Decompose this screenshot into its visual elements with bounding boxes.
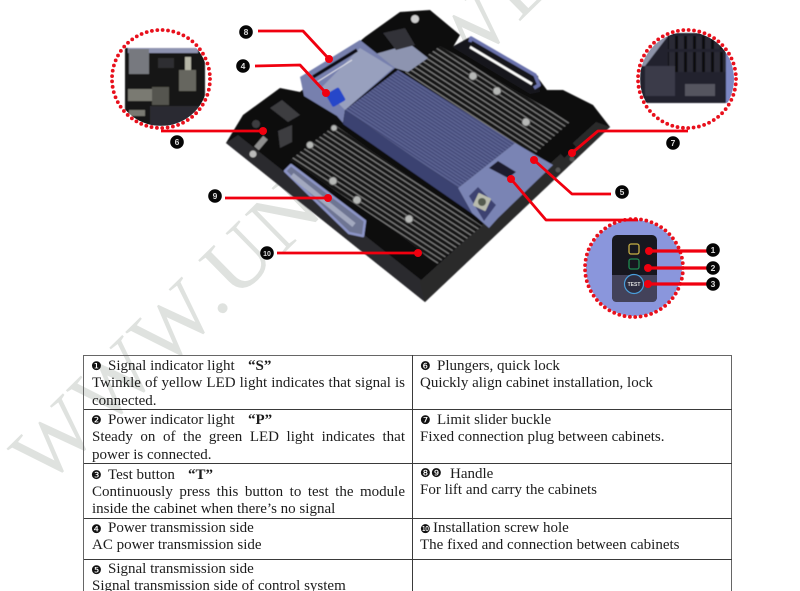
item 4 power side: AC power transmission side xyxy=(92,537,262,553)
item 3 test button: Test button xyxy=(108,467,175,483)
inset: indicator panel xyxy=(585,219,683,317)
item 6 plungers: Plungers, quick lock xyxy=(437,358,560,374)
item 7 slider: ❼ xyxy=(420,413,431,427)
number badges: 8 xyxy=(244,27,249,37)
inset: plungers xyxy=(112,30,210,128)
dotted ring xyxy=(638,30,736,128)
number badges: 1 xyxy=(711,245,716,255)
item 3 test button: “T” xyxy=(188,467,213,483)
items 8 and 9 handle: ❾ xyxy=(431,466,442,480)
item 2 power light xyxy=(91,412,405,463)
items 8 and 9 handle: Handle xyxy=(450,466,493,482)
table right column xyxy=(420,358,679,553)
item 7 slider xyxy=(420,412,665,445)
item 10 screw hole: Installation screw hole xyxy=(433,520,569,536)
item 3 test button: inside the cabinet when there’s no signal xyxy=(92,501,335,517)
heatsink screws xyxy=(306,72,530,223)
signal connector xyxy=(469,187,496,221)
item 10 screw hole xyxy=(420,520,679,553)
heatsink upper xyxy=(405,46,570,158)
item 2 power light: Power indicator light xyxy=(108,412,235,428)
number badges xyxy=(170,25,720,291)
item 7 slider: Limit slider buckle xyxy=(437,412,551,428)
power box side xyxy=(343,110,487,224)
number badges: 5 xyxy=(620,187,625,197)
item 6 plungers: Quickly align cabinet installation, lock xyxy=(420,375,653,391)
product photo: LED cabinet xyxy=(226,10,610,302)
item 2 power light: ❷ xyxy=(91,413,102,427)
item 2 power light: “P” xyxy=(248,412,272,428)
dotted ring xyxy=(112,30,210,128)
item 2 power light: Steady on of the green LED light indicates that xyxy=(92,429,405,445)
icon: green P light xyxy=(629,259,639,269)
item 7 slider: Fixed connection plug between cabinets. xyxy=(420,429,665,445)
item 3 test button xyxy=(91,467,405,517)
dotted ring xyxy=(585,219,683,317)
item 4 power side: Power transmission side xyxy=(108,520,254,536)
item 4 power side: ❹ xyxy=(91,522,102,536)
item 3 test button: Continuously press this button to test the module xyxy=(92,484,405,500)
item 1 signal light: Twinkle of yellow LED light indicates that signal is xyxy=(92,375,405,391)
lower-right frame edge xyxy=(420,122,610,302)
item 5 signal side xyxy=(91,561,346,591)
items 8 and 9 handle xyxy=(420,466,597,498)
item 10 screw hole: ❿ xyxy=(420,522,431,536)
number badges: 2 xyxy=(711,263,716,273)
plunger blocks xyxy=(250,100,300,158)
item 5 signal side: ❺ xyxy=(91,563,102,577)
power box end plate xyxy=(458,143,553,228)
dark control plate xyxy=(612,235,657,302)
heatsink lower xyxy=(290,125,482,264)
item 1 signal light xyxy=(91,358,405,409)
items 8 and 9 handle: For lift and carry the cabinets xyxy=(420,482,597,498)
top corner block xyxy=(372,15,428,72)
item 1 signal light: ❶ xyxy=(91,359,102,373)
callout dots xyxy=(259,55,653,288)
item 1 signal light: Signal indicator light xyxy=(108,358,235,374)
item 6 plungers: ❻ xyxy=(420,359,431,373)
number badges: 3 xyxy=(711,279,716,289)
item 1 signal light: connected. xyxy=(92,393,157,409)
number badges: 10 xyxy=(263,251,271,258)
callout lines xyxy=(161,31,707,284)
handle 9 xyxy=(285,165,365,236)
number badges: 9 xyxy=(213,191,218,201)
limit slider buckle xyxy=(556,138,576,172)
item 1 signal light: “S” xyxy=(248,358,271,374)
item 3 test button: ❸ xyxy=(91,468,102,482)
table grid xyxy=(84,355,732,591)
icon: yellow S light xyxy=(629,244,639,254)
item 5 signal side: Signal transmission side xyxy=(108,561,254,577)
table left column xyxy=(91,358,405,591)
test button: TEST xyxy=(628,282,640,288)
indicator panel xyxy=(489,161,516,178)
cabinet body xyxy=(226,10,610,302)
lower-left frame edge xyxy=(226,135,425,302)
item 4 power side xyxy=(91,520,262,553)
handle 7 upper xyxy=(452,37,540,94)
power side module xyxy=(300,40,395,123)
power box top xyxy=(345,70,515,188)
number badges: 6 xyxy=(175,137,180,147)
number badges: 7 xyxy=(671,138,676,148)
item 2 power light: power is connected. xyxy=(92,447,212,463)
inset: limit slider xyxy=(638,30,736,128)
item 6 plungers xyxy=(420,358,653,391)
item 10 screw hole: The fixed and connection between cabinets xyxy=(420,537,679,553)
number badges: 4 xyxy=(241,61,246,71)
items 8 and 9 handle: ❽ xyxy=(420,466,431,480)
icon: blue power connector xyxy=(325,87,346,107)
